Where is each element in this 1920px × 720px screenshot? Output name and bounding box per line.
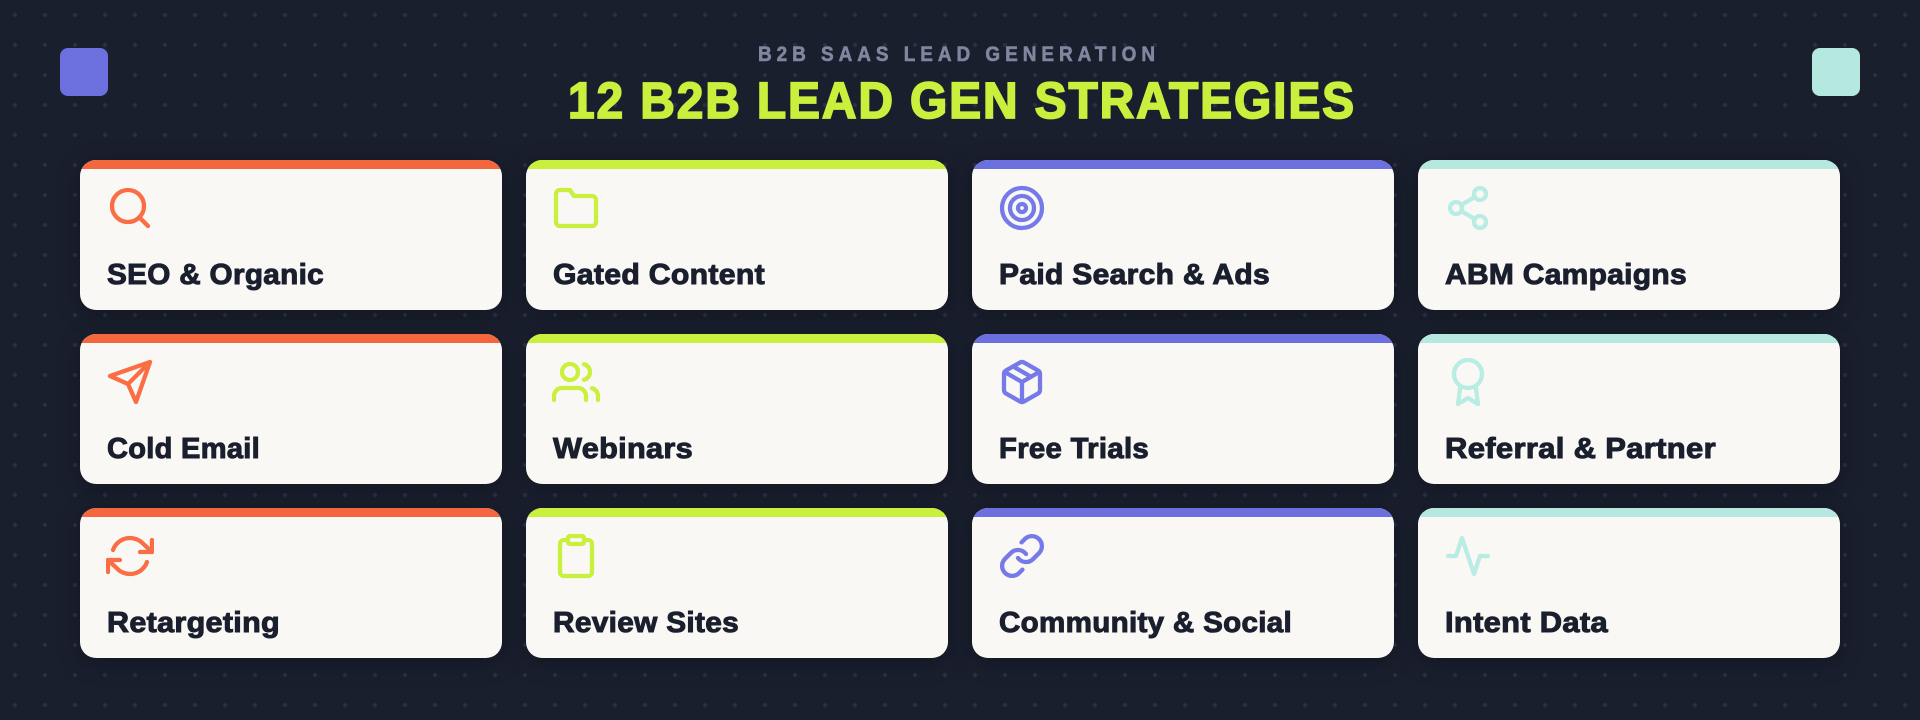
icon: share bbox=[1448, 186, 1488, 230]
card: ABM Campaigns bbox=[1418, 160, 1840, 310]
accent bar: lime bbox=[526, 160, 948, 169]
title: 12 B2B LEAD GEN STRATEGIES bbox=[568, 72, 1356, 129]
accent bar: lime bbox=[526, 508, 948, 517]
label: Webinars: Webinars bbox=[553, 433, 693, 465]
label: Paid Search & Ads: Paid Search & Ads bbox=[999, 259, 1270, 291]
card: Webinars bbox=[526, 334, 948, 484]
label: Free Trials: Free Trials bbox=[999, 433, 1149, 465]
accent bar: lime bbox=[526, 334, 948, 343]
label: Gated Content: Gated Content bbox=[553, 259, 765, 291]
accent bar: mint bbox=[1418, 160, 1840, 169]
icon: link bbox=[1000, 534, 1044, 578]
subtitle: B2B SAAS LEAD GENERATION bbox=[758, 43, 1160, 66]
accent bar: orange bbox=[80, 508, 502, 517]
icon: send bbox=[108, 360, 152, 404]
icon: activity bbox=[1446, 536, 1490, 576]
label: ABM Campaigns: ABM Campaigns bbox=[1445, 259, 1687, 291]
label: Referral & Partner: Referral & Partner bbox=[1445, 433, 1716, 465]
label: Retargeting: Retargeting bbox=[107, 607, 280, 639]
card: Review Sites bbox=[526, 508, 948, 658]
accent bar: orange bbox=[80, 334, 502, 343]
icon: search bbox=[110, 188, 150, 228]
accent bar: purple bbox=[972, 508, 1394, 517]
label: Review Sites: Review Sites bbox=[553, 607, 739, 639]
accent bar: purple bbox=[972, 334, 1394, 343]
card: Community & Social bbox=[972, 508, 1394, 658]
decorative square: mint bbox=[1812, 48, 1860, 96]
card: Intent Data bbox=[1418, 508, 1840, 658]
icon: award bbox=[1452, 358, 1484, 406]
card: SEO & Organic bbox=[80, 160, 502, 310]
icon: target bbox=[1000, 186, 1044, 230]
decorative square: purple bbox=[60, 48, 108, 96]
card: Referral & Partner bbox=[1418, 334, 1840, 484]
label: Cold Email: Cold Email bbox=[107, 433, 260, 465]
icon: folder bbox=[554, 188, 598, 228]
icon: users bbox=[552, 362, 600, 402]
label: Community & Social: Community & Social bbox=[999, 607, 1292, 639]
accent bar: purple bbox=[972, 160, 1394, 169]
card: Cold Email bbox=[80, 334, 502, 484]
card: Gated Content bbox=[526, 160, 948, 310]
icon: refresh bbox=[106, 536, 154, 576]
card: Free Trials bbox=[972, 334, 1394, 484]
accent bar: mint bbox=[1418, 508, 1840, 517]
card: Paid Search & Ads bbox=[972, 160, 1394, 310]
header bbox=[568, 43, 1356, 129]
accent bar: mint bbox=[1418, 334, 1840, 343]
icon: package bbox=[1002, 360, 1042, 404]
card: Retargeting bbox=[80, 508, 502, 658]
label: SEO & Organic: SEO & Organic bbox=[107, 259, 324, 291]
label: Intent Data: Intent Data bbox=[1445, 607, 1608, 639]
icon: clipboard bbox=[558, 534, 594, 578]
accent bar: orange bbox=[80, 160, 502, 169]
